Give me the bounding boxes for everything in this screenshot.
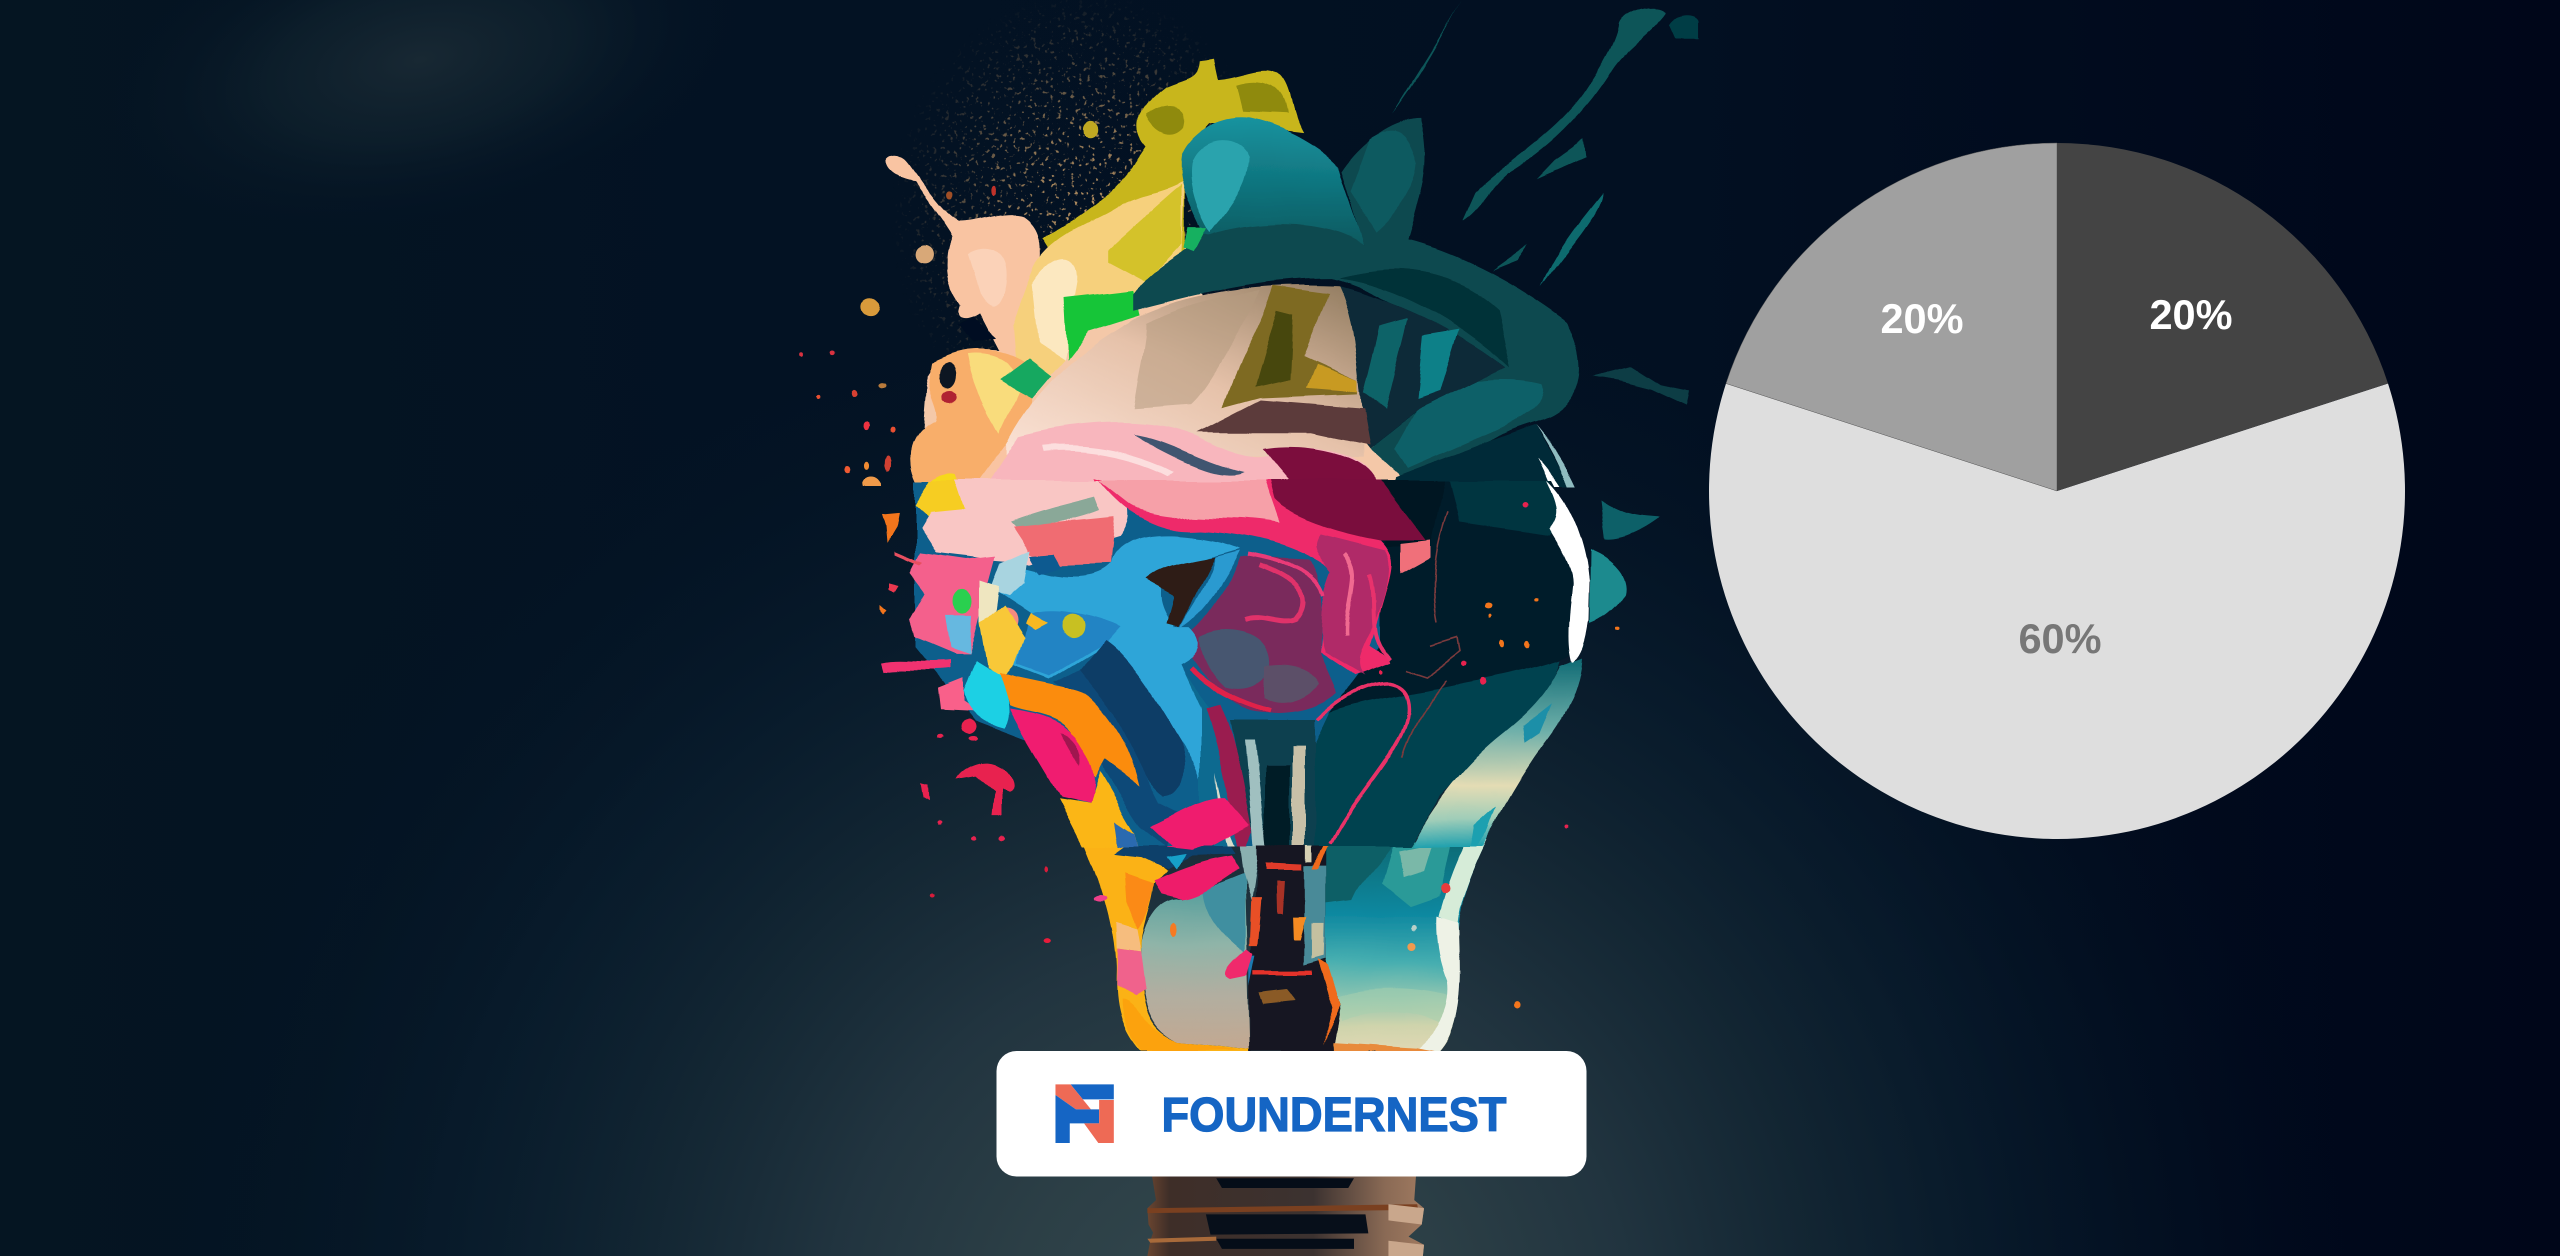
left grey glass: [1141, 873, 1249, 1048]
pale yellow midsection: [1013, 181, 1184, 376]
paint drops and specks: [800, 120, 1097, 494]
logo wordmark: FOUNDERNEST: [1162, 1088, 1507, 1142]
dark navy glass upper right: [1315, 480, 1586, 720]
hot pink shards: [1153, 855, 1239, 898]
rose swirl: [1100, 480, 1392, 677]
pink wire loop: [1318, 683, 1409, 843]
logo icon: [1055, 1084, 1114, 1143]
slice: 60 percent: [1709, 384, 2405, 839]
slice: 60 percent: 60%: [2018, 615, 2102, 662]
orange bottom rim: [1333, 1042, 1439, 1051]
slice: 20 percent dark: [2057, 143, 2388, 491]
left pink paint: [910, 553, 995, 653]
bulb paint and glass: [800, 0, 1700, 1051]
left pink shard: [938, 677, 978, 710]
logo card: [996, 1051, 1586, 1176]
teal tendrils upper right: [1392, 0, 1700, 404]
slice: 20 percent light: [1726, 143, 2057, 491]
outer teal blobs: [1590, 550, 1626, 623]
dark teal paint mass: [1134, 118, 1580, 478]
magenta center: [1180, 557, 1338, 713]
dark glass lower right: [1395, 424, 1566, 488]
orange droplets and splashes: [880, 513, 1620, 647]
pink swirl: [991, 422, 1374, 482]
illustration: paint-splash light bulb: [800, 0, 1700, 1256]
orange and yellow paint band: [1082, 840, 1249, 1051]
paint dust cloud: [899, 0, 1245, 351]
right teal glass: [1325, 840, 1488, 1051]
paint underlayer: [924, 248, 1400, 480]
yellow paint crest: [1042, 58, 1304, 253]
left pink tendril: [880, 660, 950, 671]
yellow strip: [980, 607, 1025, 680]
beige glass top: [1006, 285, 1363, 457]
upper paint explosion: [799, 4, 1698, 488]
bulb interior dark area: [1338, 286, 1507, 449]
white glass highlight: [1548, 480, 1590, 662]
medium blue lower: [1140, 667, 1250, 857]
bright teal crest: [1181, 118, 1363, 245]
lower bulb: glass, stem and paint: [930, 840, 1521, 1051]
navy wedges: [1080, 640, 1185, 797]
droplets: [930, 866, 1521, 1007]
orange paint: [1000, 673, 1140, 787]
stem: [1245, 840, 1341, 1051]
filament neck: [1230, 720, 1315, 872]
pie chart: [1709, 143, 2405, 839]
blue paint: [1000, 535, 1240, 780]
navy paint: [1115, 840, 1235, 868]
yellow and green spots: [1062, 614, 1084, 638]
dark teal glass lower right: [1310, 660, 1560, 872]
glass edge: [1400, 657, 1582, 872]
green paint: [1064, 290, 1140, 359]
thin wires: [1402, 513, 1460, 757]
screw base of bulb: [1147, 1176, 1424, 1256]
cyan blob: [962, 660, 1010, 728]
hot pink shard: [1150, 798, 1250, 850]
cream glass edge: [1439, 840, 1488, 927]
dark gap: [959, 318, 996, 340]
hot pink paint: [1010, 710, 1094, 803]
peach paint column: [886, 156, 1040, 482]
red splashes: [920, 502, 1568, 841]
slice: 20 percent dark: 20%: [2149, 291, 2233, 338]
middle bulb: swirl, blue paint and filament: [880, 480, 1660, 872]
lower peach and yellow drips: [910, 348, 1032, 482]
pale blue patch: [990, 550, 1030, 597]
paint underlayer: [915, 480, 1380, 872]
brown hole: [1145, 557, 1215, 627]
slice: 20 percent light: 20%: [1880, 295, 1964, 342]
top yellow and cream: [915, 480, 980, 520]
yellow lower band: [1058, 773, 1170, 872]
